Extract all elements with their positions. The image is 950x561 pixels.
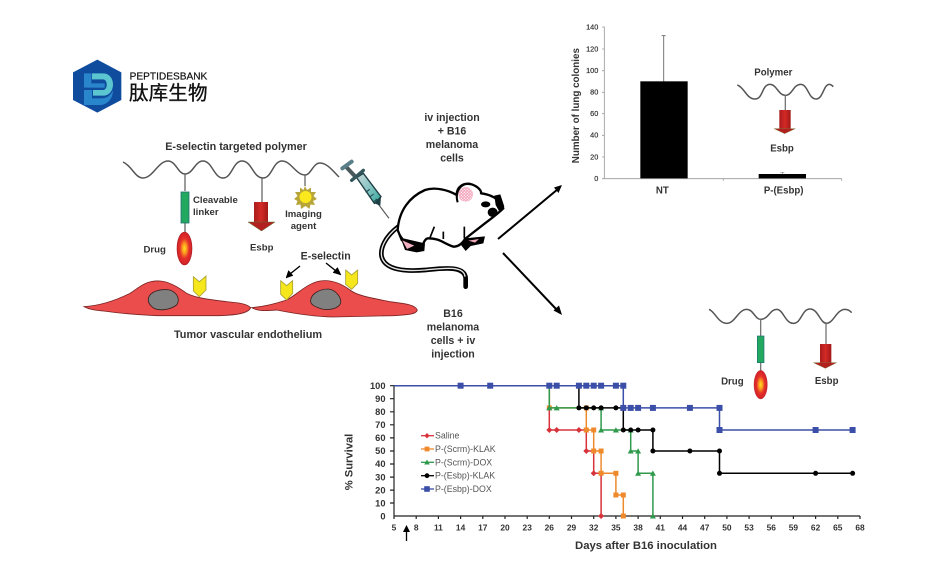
series: P-(Scrm)-DOX <box>394 386 653 516</box>
inset polymer chain <box>737 84 833 99</box>
y tick labels: 20 <box>590 152 598 161</box>
cell 2 <box>252 281 417 317</box>
x axis title: Days after B16 inoculation <box>575 540 717 552</box>
legend: P-(Scrm)-KLAK: P-(Scrm)-KLAK <box>435 444 496 454</box>
inset: polymer with Esbp: Polymer <box>754 68 793 79</box>
series: P-(Scrm)-KLAK <box>394 386 623 516</box>
arrows: E-selectin pointers <box>286 263 341 278</box>
legend <box>421 431 496 494</box>
x tick labels: 50 <box>722 522 732 532</box>
label: E-selectin: E-selectin <box>301 250 351 262</box>
y tick labels: 0 <box>380 512 386 522</box>
leg creases <box>430 227 464 239</box>
heading: polymer: E-selectin targeted polymer <box>165 141 308 153</box>
bar chart: number of lung colonies <box>571 22 842 197</box>
inset: polymer with Esbp <box>737 68 833 154</box>
x tick labels: 17 <box>478 522 488 532</box>
label: imaging agent: Imaging <box>285 209 322 220</box>
logo text <box>129 71 208 104</box>
y tick labels: 60 <box>375 433 386 443</box>
y tick labels: 100 <box>370 381 386 391</box>
y tick labels: 40 <box>375 459 386 469</box>
y tick labels: 90 <box>375 394 386 404</box>
y tick labels: 50 <box>375 446 386 456</box>
text: iv injection + B16 melanoma cells: + B16 <box>438 126 466 138</box>
error bar NT <box>662 36 666 81</box>
text: iv injection + B16 melanoma cells: iv injection <box>424 112 480 124</box>
x tick labels: 23 <box>523 522 532 532</box>
x tick labels: 53 <box>744 522 754 532</box>
label: Esbp: Esbp <box>250 242 274 254</box>
eye and nose <box>481 194 504 217</box>
logo: PeptidesBank <box>73 60 208 113</box>
y axis title: Number of lung colonies <box>571 48 582 163</box>
inset: polymer with Esbp: Esbp <box>770 143 794 154</box>
error bar P-(Esbp) <box>780 172 784 174</box>
icon: syringe <box>342 162 389 218</box>
x tick labels: 41 <box>656 522 665 532</box>
y tick labels: 10 <box>375 498 386 508</box>
x tick labels: 56 <box>767 522 776 532</box>
x tick labels: 35 <box>611 522 621 532</box>
y tick labels: 140 <box>586 22 598 31</box>
series: Saline <box>394 386 601 516</box>
x tick labels: 59 <box>789 522 798 532</box>
y tick labels: 60 <box>590 109 598 118</box>
bar NT <box>640 81 688 178</box>
x tick labels: 65 <box>833 522 843 532</box>
y tick labels: 70 <box>375 420 386 430</box>
logo text: 肽库生物 <box>129 82 208 104</box>
series: P-(Esbp)-KLAK <box>394 386 853 473</box>
y axis title: % Survival <box>344 434 356 490</box>
cell 1 <box>84 281 251 316</box>
series: P-(Esbp)-DOX <box>394 386 853 430</box>
y tick labels: 30 <box>375 472 386 482</box>
E-selectin receptors <box>193 270 358 300</box>
logo text: PEPTIDESBANK <box>130 71 208 82</box>
arrow: Esbp <box>248 178 275 231</box>
arrow: to lung colonies <box>498 185 562 239</box>
y tick labels: 80 <box>375 407 386 417</box>
icon: hexagon P mark <box>73 60 121 113</box>
paws <box>398 230 485 252</box>
legend: P-(Scrm)-DOX: P-(Scrm)-DOX <box>435 457 492 467</box>
text: iv injection + B16 melanoma cells: cells <box>440 152 464 164</box>
arrow: Esbp <box>813 323 837 368</box>
x tick labels <box>392 522 865 532</box>
x tick labels: 38 <box>633 522 643 532</box>
inset: polymer with drug and Esbp <box>709 309 852 399</box>
x tick labels: 47 <box>700 522 710 532</box>
y tick labels: 100 <box>586 66 598 75</box>
bar P-(Esbp) <box>759 174 806 178</box>
body <box>398 184 503 248</box>
y tick labels: 40 <box>590 131 598 140</box>
text: B16 melanoma cells + iv injection: cells + iv <box>431 335 475 347</box>
legend: P-(Esbp)-DOX: P-(Esbp)-DOX <box>435 484 492 494</box>
arrow: treatment day <box>403 525 410 541</box>
polymer chain <box>123 161 339 178</box>
axes <box>602 27 842 181</box>
text: B16 melanoma cells + iv injection: melanoma <box>427 322 479 334</box>
x tick labels: 14 <box>456 522 466 532</box>
ear <box>457 184 473 202</box>
label: P-(Esbp): P-(Esbp) <box>764 186 804 197</box>
x labels: NT <box>656 186 669 197</box>
label: cleavable linker: Cleavable <box>193 195 238 206</box>
linker and drug <box>177 174 192 265</box>
x tick labels: 44 <box>678 522 687 532</box>
x tick labels: 5 <box>392 522 397 532</box>
x tick labels: 20 <box>500 522 510 532</box>
x tick labels: 26 <box>545 522 554 532</box>
x tick labels: 62 <box>811 522 821 532</box>
line chart: survival <box>344 381 865 552</box>
legend: Saline: Saline <box>435 431 460 441</box>
y tick labels: 20 <box>375 486 386 496</box>
x tick labels: 8 <box>414 522 419 532</box>
arrow: to survival <box>503 253 562 315</box>
y tick labels <box>370 381 386 522</box>
y tick labels <box>586 22 598 183</box>
x tick labels: 29 <box>567 522 576 532</box>
axes <box>390 386 860 519</box>
tail <box>381 227 466 287</box>
text: B16 melanoma cells + iv injection: injection <box>431 348 475 360</box>
label: tumor vascular endothelium: Tumor vascular endothelium <box>174 329 322 341</box>
tumor endothelial cells <box>84 270 417 317</box>
label: cleavable linker: linker <box>193 207 219 218</box>
icon: mouse <box>381 184 504 287</box>
x tick labels: 32 <box>589 522 599 532</box>
label: drug: Drug <box>144 244 166 256</box>
label: imaging agent: agent <box>291 221 317 232</box>
y tick labels: 80 <box>590 88 598 97</box>
linker and drug <box>754 319 767 399</box>
text: iv injection + B16 melanoma cells: melanoma <box>426 139 478 151</box>
x tick labels: 68 <box>855 522 865 532</box>
polymer chain <box>709 309 852 323</box>
legend: P-(Esbp)-KLAK: P-(Esbp)-KLAK <box>435 471 495 481</box>
label: drug: Drug <box>721 377 744 388</box>
x tick labels: 11 <box>434 522 443 532</box>
text: B16 melanoma cells + iv injection: B16 <box>443 308 463 320</box>
y tick labels: 0 <box>594 174 598 183</box>
label: Esbp: Esbp <box>815 376 839 387</box>
y tick labels: 120 <box>586 44 598 53</box>
panel: E-selectin targeted polymer schematic <box>84 141 417 341</box>
icon: imaging agent sun <box>294 175 317 209</box>
